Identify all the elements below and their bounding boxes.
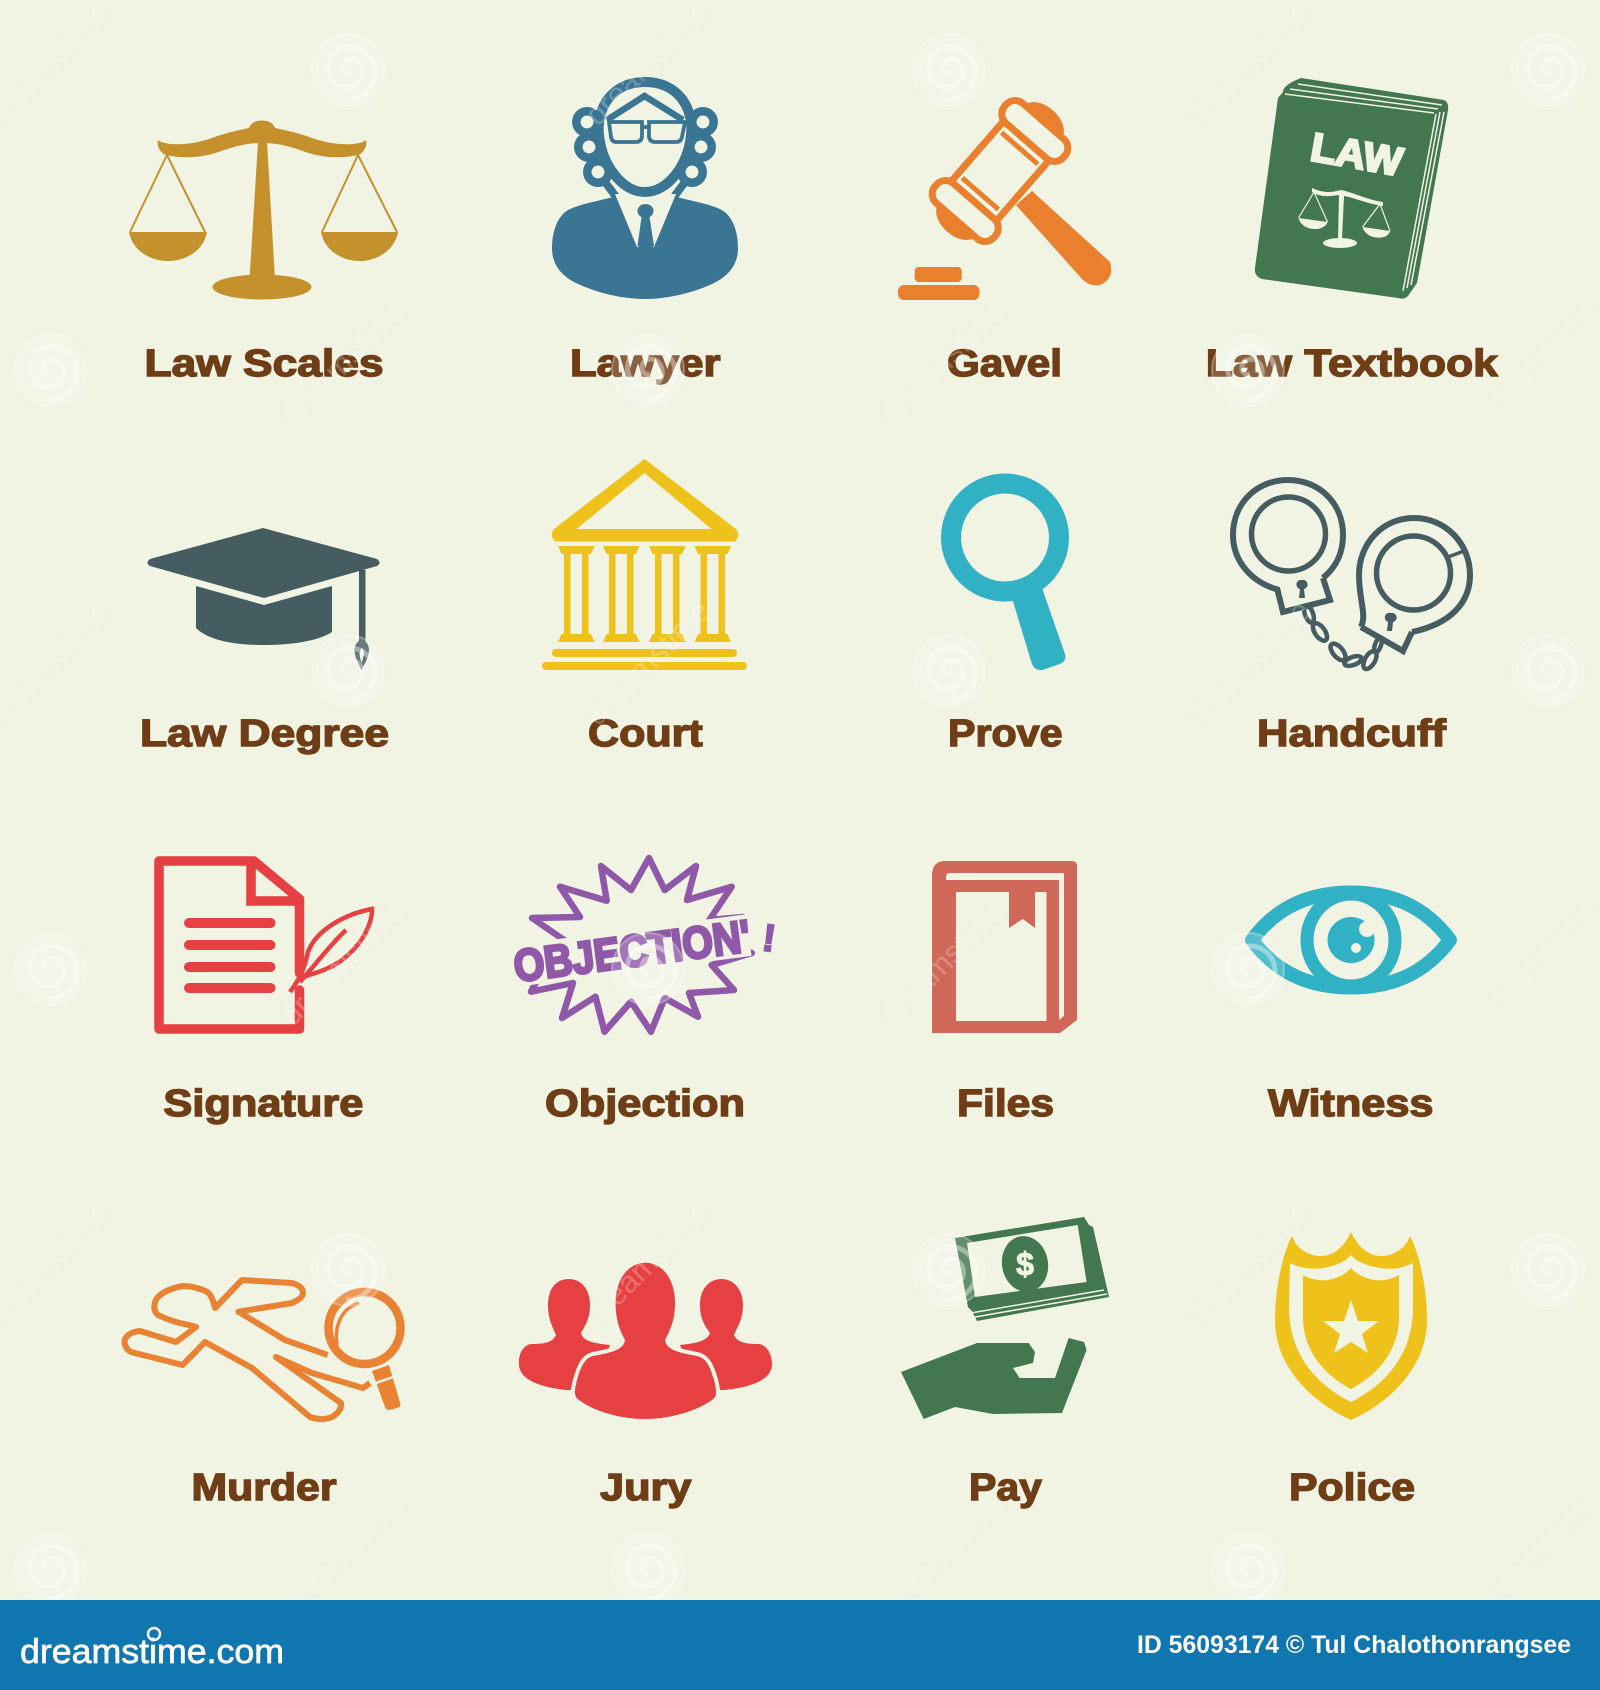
panel: court [542,459,747,755]
icon: objection burst [508,858,778,1032]
watermark: spirals and site names: dreamstime [873,293,1012,432]
icon: police badge [1275,1232,1427,1420]
watermark: spirals and site names: dreamstime [1178,1193,1317,1332]
icon: handcuffs [1233,480,1470,671]
panel: files [932,861,1077,1125]
label: Jury: Jury [600,1467,692,1509]
icon: body outline with magnifier [125,1280,401,1419]
panel: signature [159,861,372,1125]
icon: law textbook [1255,78,1448,299]
label: Prove: Prove [948,713,1062,755]
panel: murder [125,1280,401,1509]
icon: magnifying glass [951,484,1065,670]
watermark: spirals and site names: dreamstime [273,893,412,1032]
label: Gavel: Gavel [947,343,1062,385]
watermark: spirals and site names: dreamstime [578,1193,717,1332]
icon: three people [519,1263,772,1419]
label: Court: Court [588,713,703,755]
watermark: spirals and site names: dreamstime [1178,593,1317,732]
label: Signature: Signature [163,1083,363,1125]
panel: gavel [898,87,1111,385]
label: Pay: Pay [969,1467,1042,1509]
watermark: spirals and site names: dreamstime [273,1483,412,1622]
footer bar [0,1600,1600,1690]
watermark: spirals and site names: dreamstime [873,1483,1012,1622]
icon: document with quill [159,861,372,1029]
panel: prove [948,484,1065,755]
watermark: spirals and site names: dreamstime [578,593,717,732]
label: Handcuff: Handcuff [1257,713,1446,755]
icon: law scales [129,120,398,300]
icon: eye [1252,892,1450,988]
footer logo spiral [148,1628,160,1640]
panel: pay [901,1217,1109,1509]
label: Law Degree: Law Degree [140,713,389,755]
label: Murder: Murder [192,1467,337,1509]
label: Witness: Witness [1268,1083,1434,1125]
dollar sign: $ [1016,1246,1034,1282]
watermark: spirals and site names: dreamstime [873,893,1012,1032]
panel: law degree [140,528,389,755]
icon: graduation cap [148,528,380,670]
panel: law scales [129,120,398,385]
label: Law Textbook: Law Textbook [1206,343,1499,385]
label: Police: Police [1289,1467,1415,1509]
icon: book with bookmark [932,861,1077,1033]
watermark: spirals and site names: dreamstime [273,293,412,432]
icon: hand with money [901,1217,1109,1419]
label: Files: Files [957,1083,1054,1125]
footer logo text: dreamstime.com [20,1633,284,1671]
panel: witness [1252,892,1450,1125]
label: Law Scales: Law Scales [144,343,384,385]
icon: lawyer [552,82,738,299]
panel: law textbook [1206,78,1499,385]
panel: handcuff [1233,480,1470,755]
panel: police [1275,1232,1427,1509]
label: Lawyer: Lawyer [570,343,721,385]
icon: court building [542,459,747,670]
panel: lawyer [552,82,738,385]
footer credit: ID 56093174 © Tul Chalothonrangsee [1137,1631,1571,1659]
panel: jury [519,1263,772,1509]
exclamation mark: ! [760,917,778,961]
burst text: OBJECTION' [511,910,753,992]
text backdrop [508,914,752,987]
panel: objection [508,858,778,1125]
icon: gavel [898,87,1111,300]
label: Objection: Objection [545,1083,745,1125]
book title: LAW [1307,126,1406,185]
